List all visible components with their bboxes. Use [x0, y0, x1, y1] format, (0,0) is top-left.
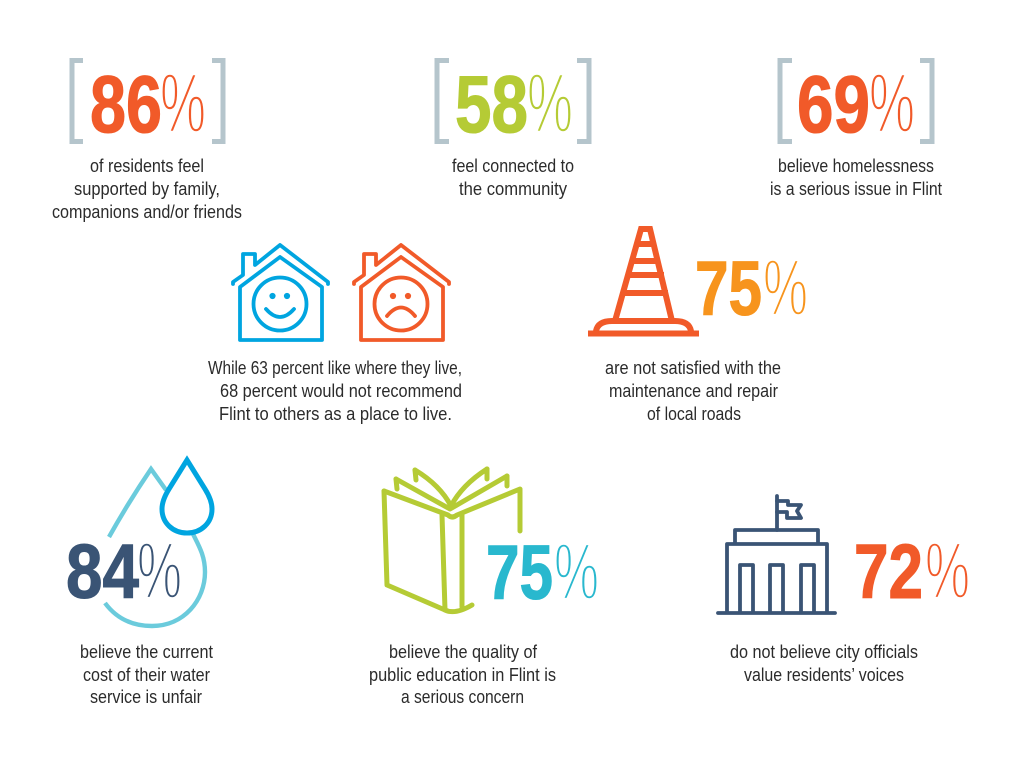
icon: city hall — [718, 496, 835, 613]
brackets — [780, 60, 932, 142]
caption: value residents’ voices — [744, 664, 904, 685]
caption: Flint to others as a place to live. — [219, 403, 452, 424]
stat: 75 percent roads — [588, 229, 808, 424]
caption — [452, 155, 574, 199]
icon: sad house — [354, 245, 449, 340]
figure: 69 — [797, 60, 870, 150]
caption: feel connected to — [452, 155, 574, 176]
stat: 75 percent education — [369, 469, 599, 707]
figure: 86 — [90, 60, 162, 150]
percent sign: % — [554, 527, 599, 616]
caption: supported by family, — [74, 178, 220, 199]
caption: believe homelessness — [778, 155, 934, 176]
stat: 69 percent homelessness — [770, 56, 942, 199]
panel: houses — [208, 245, 462, 424]
caption: of residents feel — [90, 155, 204, 176]
stat: 58 percent connected — [437, 56, 589, 199]
caption: believe the current — [80, 641, 213, 662]
icon: traffic cone — [588, 229, 699, 334]
percent sign: % — [137, 526, 182, 615]
percent sign: % — [925, 526, 970, 615]
stat: 84 percent water — [66, 460, 213, 707]
stat: 86 percent supported — [52, 56, 242, 222]
caption: of local roads — [647, 403, 741, 424]
percent sign: % — [160, 56, 206, 150]
caption — [369, 641, 556, 707]
figure: 75 — [695, 246, 762, 332]
caption — [80, 641, 213, 707]
percent sign: % — [869, 56, 915, 150]
caption: believe the quality of — [389, 641, 538, 662]
caption: companions and/or friends — [52, 201, 242, 222]
stat: 72 percent city officials — [718, 496, 970, 685]
caption: public education in Flint is — [369, 664, 556, 685]
caption: a serious concern — [401, 686, 524, 707]
caption: 68 percent would not recommend — [220, 380, 462, 401]
figure: 58 — [455, 60, 528, 150]
caption — [208, 357, 462, 424]
icon: large water drop — [105, 469, 205, 626]
percent sign: % — [763, 243, 808, 332]
figure: 84 — [66, 529, 139, 615]
caption — [605, 357, 781, 424]
caption — [730, 641, 918, 685]
caption: are not satisfied with the — [605, 357, 781, 378]
caption: the community — [459, 178, 568, 199]
caption: do not believe city officials — [730, 641, 918, 662]
icon: happy house — [233, 245, 328, 340]
caption: While 63 percent like where they live, — [208, 357, 462, 378]
icon: small water drop — [162, 460, 212, 533]
figure: 75 — [486, 530, 553, 616]
caption: is a serious issue in Flint — [770, 178, 942, 199]
percent sign: % — [527, 56, 573, 150]
caption: service is unfair — [90, 686, 202, 707]
caption: maintenance and repair — [609, 380, 778, 401]
icon: open book — [384, 469, 520, 612]
brackets — [72, 60, 223, 142]
figure: 72 — [854, 529, 923, 615]
caption: cost of their water — [83, 664, 210, 685]
caption — [52, 155, 242, 222]
brackets — [437, 60, 589, 142]
caption — [770, 155, 942, 199]
